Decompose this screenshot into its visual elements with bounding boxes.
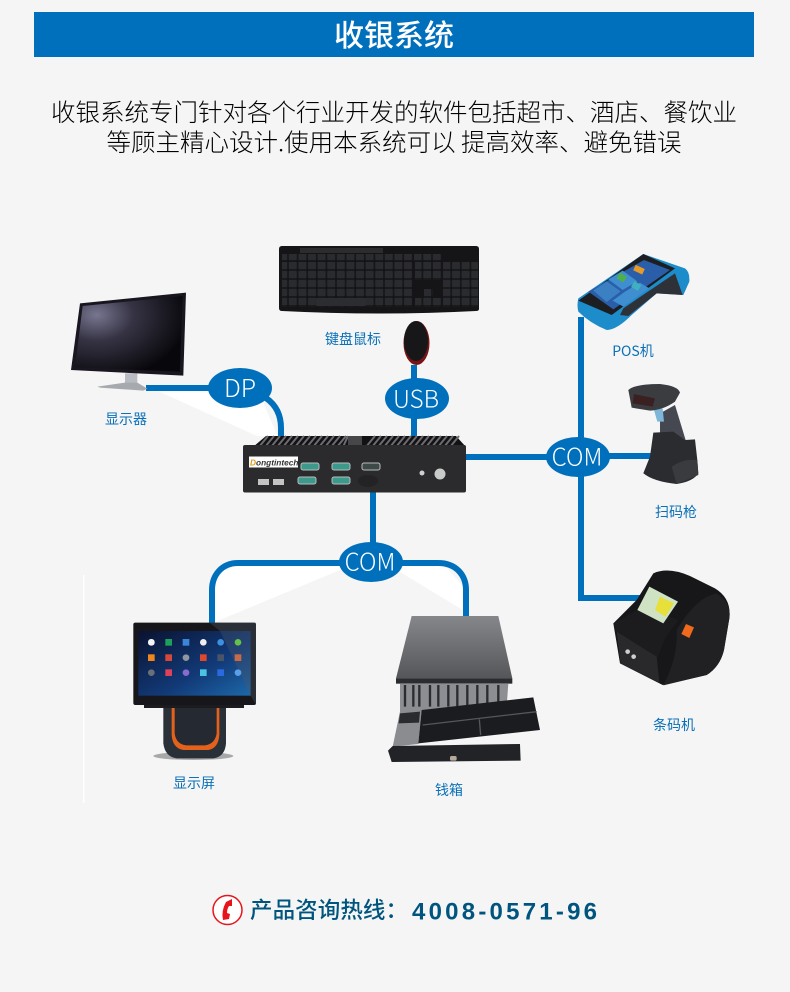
badge: COM bottom [339, 542, 403, 582]
icon: label printer [613, 571, 730, 685]
intro text [51, 94, 737, 159]
icon: fanless industrial PC: Dongtintech [250, 458, 298, 468]
badge: COM bottom: COM [345, 542, 395, 578]
title banner [34, 11, 754, 57]
label: scanner: 扫码枪 [655, 502, 697, 522]
label: display: 显示屏 [173, 773, 215, 793]
label: POS: POS机 [612, 341, 654, 361]
intro text: 收银系统专门针对各个行业开发的软件包括超市、酒店、餐饮业 [51, 94, 737, 129]
hotline [213, 893, 597, 926]
icon: barcode scanner [628, 384, 698, 484]
icon: phone [213, 896, 242, 924]
label: keyboard and mouse: 键盘鼠标 [325, 329, 381, 349]
label: monitor: 显示器 [105, 409, 147, 429]
icon: POS terminal [577, 254, 689, 330]
intro text: 等顾主精心设计.使用本系统可以 提高效率、避免错误 [106, 124, 682, 159]
label: cash drawer: 钱箱 [435, 780, 463, 800]
icon: keyboard [279, 246, 479, 314]
badge: COM right: COM [552, 438, 602, 472]
hotline: 产品咨询热线： [250, 893, 408, 925]
badge: DP: DP [224, 369, 256, 405]
title banner: 收银系统 [334, 11, 454, 55]
badge: USB [385, 378, 449, 419]
icon: POS touch display [133, 623, 256, 760]
icon: cash drawer [388, 616, 540, 762]
icon: mouse [404, 321, 430, 365]
icon: monitor [71, 293, 186, 391]
badge: COM right [546, 437, 610, 477]
icon: fanless industrial PC [243, 436, 466, 492]
badge: USB: USB [393, 380, 439, 414]
hotline: 4008-0571-96 [412, 898, 597, 926]
badge: DP [208, 368, 272, 408]
white light wedges [83, 391, 466, 803]
label: barcode printer: 条码机 [653, 715, 695, 735]
connection lines [146, 317, 652, 623]
